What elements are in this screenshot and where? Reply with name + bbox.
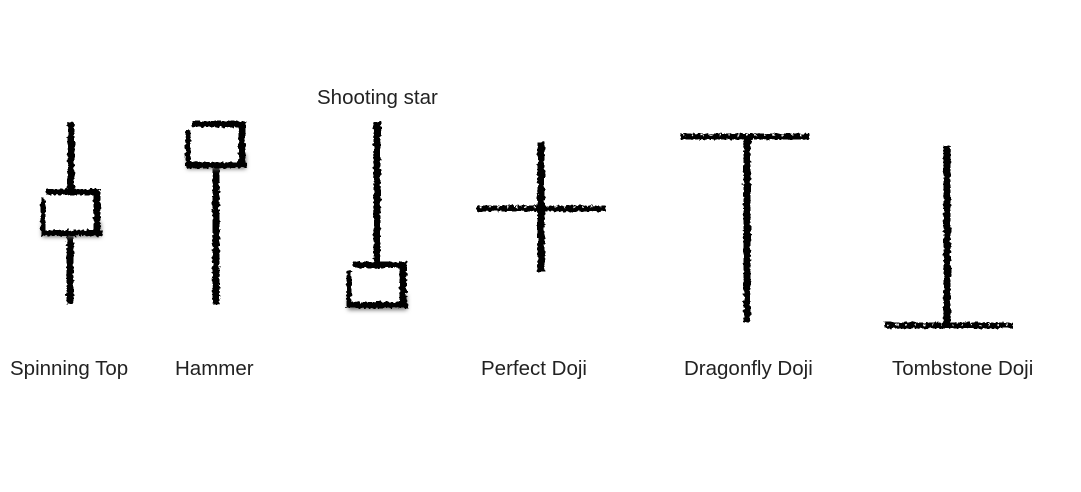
candlestick: spinning top xyxy=(41,122,102,304)
candlestick: perfect doji xyxy=(477,142,606,272)
label: perfect doji: Perfect Doji xyxy=(481,357,587,380)
label: dragonfly doji: Dragonfly Doji xyxy=(684,357,813,380)
label: spinning top: Spinning Top xyxy=(10,357,128,380)
candlestick: tombstone doji xyxy=(884,146,1013,326)
candlestick: shooting star xyxy=(347,122,408,310)
candlestick: dragonfly doji xyxy=(680,135,809,322)
label: hammer: Hammer xyxy=(175,357,254,380)
label: tombstone doji: Tombstone Doji xyxy=(892,357,1033,380)
candlestick: hammer xyxy=(186,124,247,304)
label: shooting star: Shooting star xyxy=(317,86,438,109)
